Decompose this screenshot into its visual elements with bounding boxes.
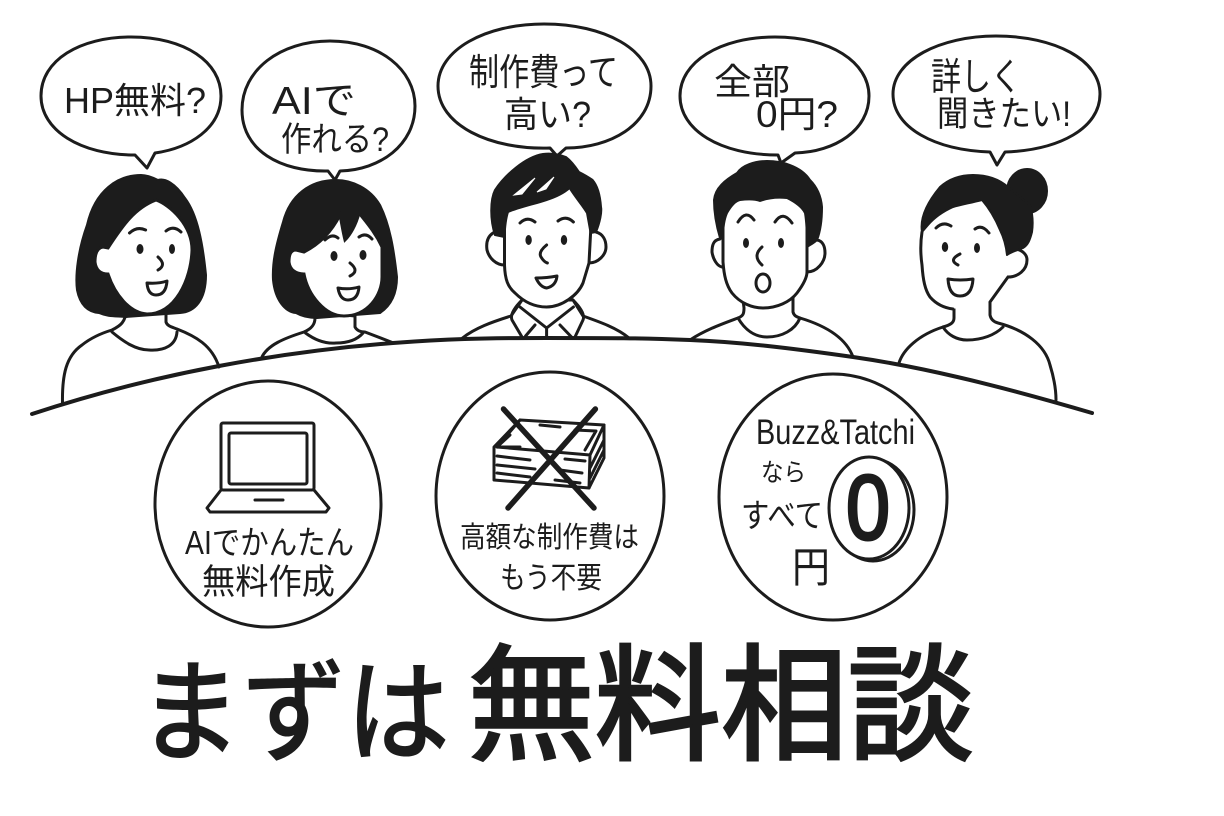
person 4: man with short hair: [690, 161, 853, 357]
circle panel: AI free creation: 無料作成: [202, 563, 335, 602]
speech bubble: AIで作れる?: AIで: [272, 80, 356, 123]
speech bubble: 全部0円?: 0円?: [756, 94, 838, 135]
speech bubble: 制作費って高い?: [438, 24, 651, 156]
label: 円: 円: [792, 544, 830, 591]
title: まずは無料相談: [138, 636, 974, 777]
circle panel: everything 0 yen: [719, 374, 947, 620]
speech bubble: 全部0円?: [680, 37, 869, 163]
title: まずは無料相談: 無料相談: [468, 636, 974, 777]
icon: laptop: [207, 423, 329, 512]
speech bubble: 詳しく聞きたい!: 詳しく: [931, 57, 1021, 99]
speech bubble: AIで作れる?: 作れる?: [281, 121, 389, 159]
arched table line: [32, 338, 1092, 414]
person 1: woman with bob hair: [62, 175, 219, 403]
circle panel: AI free creation: [155, 381, 381, 627]
title: まずは無料相談: まずは: [138, 651, 450, 776]
label: AIでかんたん: [185, 524, 354, 561]
icon: crossed-out stack of paper: [494, 409, 604, 508]
person 3: man with shirt collar: [462, 154, 629, 338]
person 2: woman with bangs: [262, 180, 397, 358]
speech bubble: HP無料?: [41, 37, 221, 168]
speech bubble: 詳しく聞きたい!: [893, 36, 1100, 165]
icon: zero coin: 0: [846, 457, 890, 559]
brand name: Buzz&Tatchi: [756, 413, 915, 452]
label: なら: なら: [761, 459, 806, 487]
label: 高額な制作費は: [460, 521, 639, 554]
speech bubble: AIで作れる?: [242, 41, 415, 180]
speech bubble: HP無料?: HP無料?: [64, 80, 206, 121]
icon: zero coin: [829, 457, 914, 561]
label: すべて: すべて: [741, 497, 823, 534]
speech bubble: 制作費って高い?: 制作費って: [469, 52, 618, 93]
speech bubble: 全部0円?: 全部: [714, 61, 790, 102]
person 5: woman with hair bun: [899, 169, 1056, 400]
speech bubble: 詳しく聞きたい!: 聞きたい!: [937, 95, 1071, 134]
speech bubble: 制作費って高い?: 高い?: [504, 94, 591, 135]
circle panel: costly production no longer needed: もう不要: [500, 562, 602, 595]
circle panel: costly production no longer needed: [436, 372, 664, 620]
